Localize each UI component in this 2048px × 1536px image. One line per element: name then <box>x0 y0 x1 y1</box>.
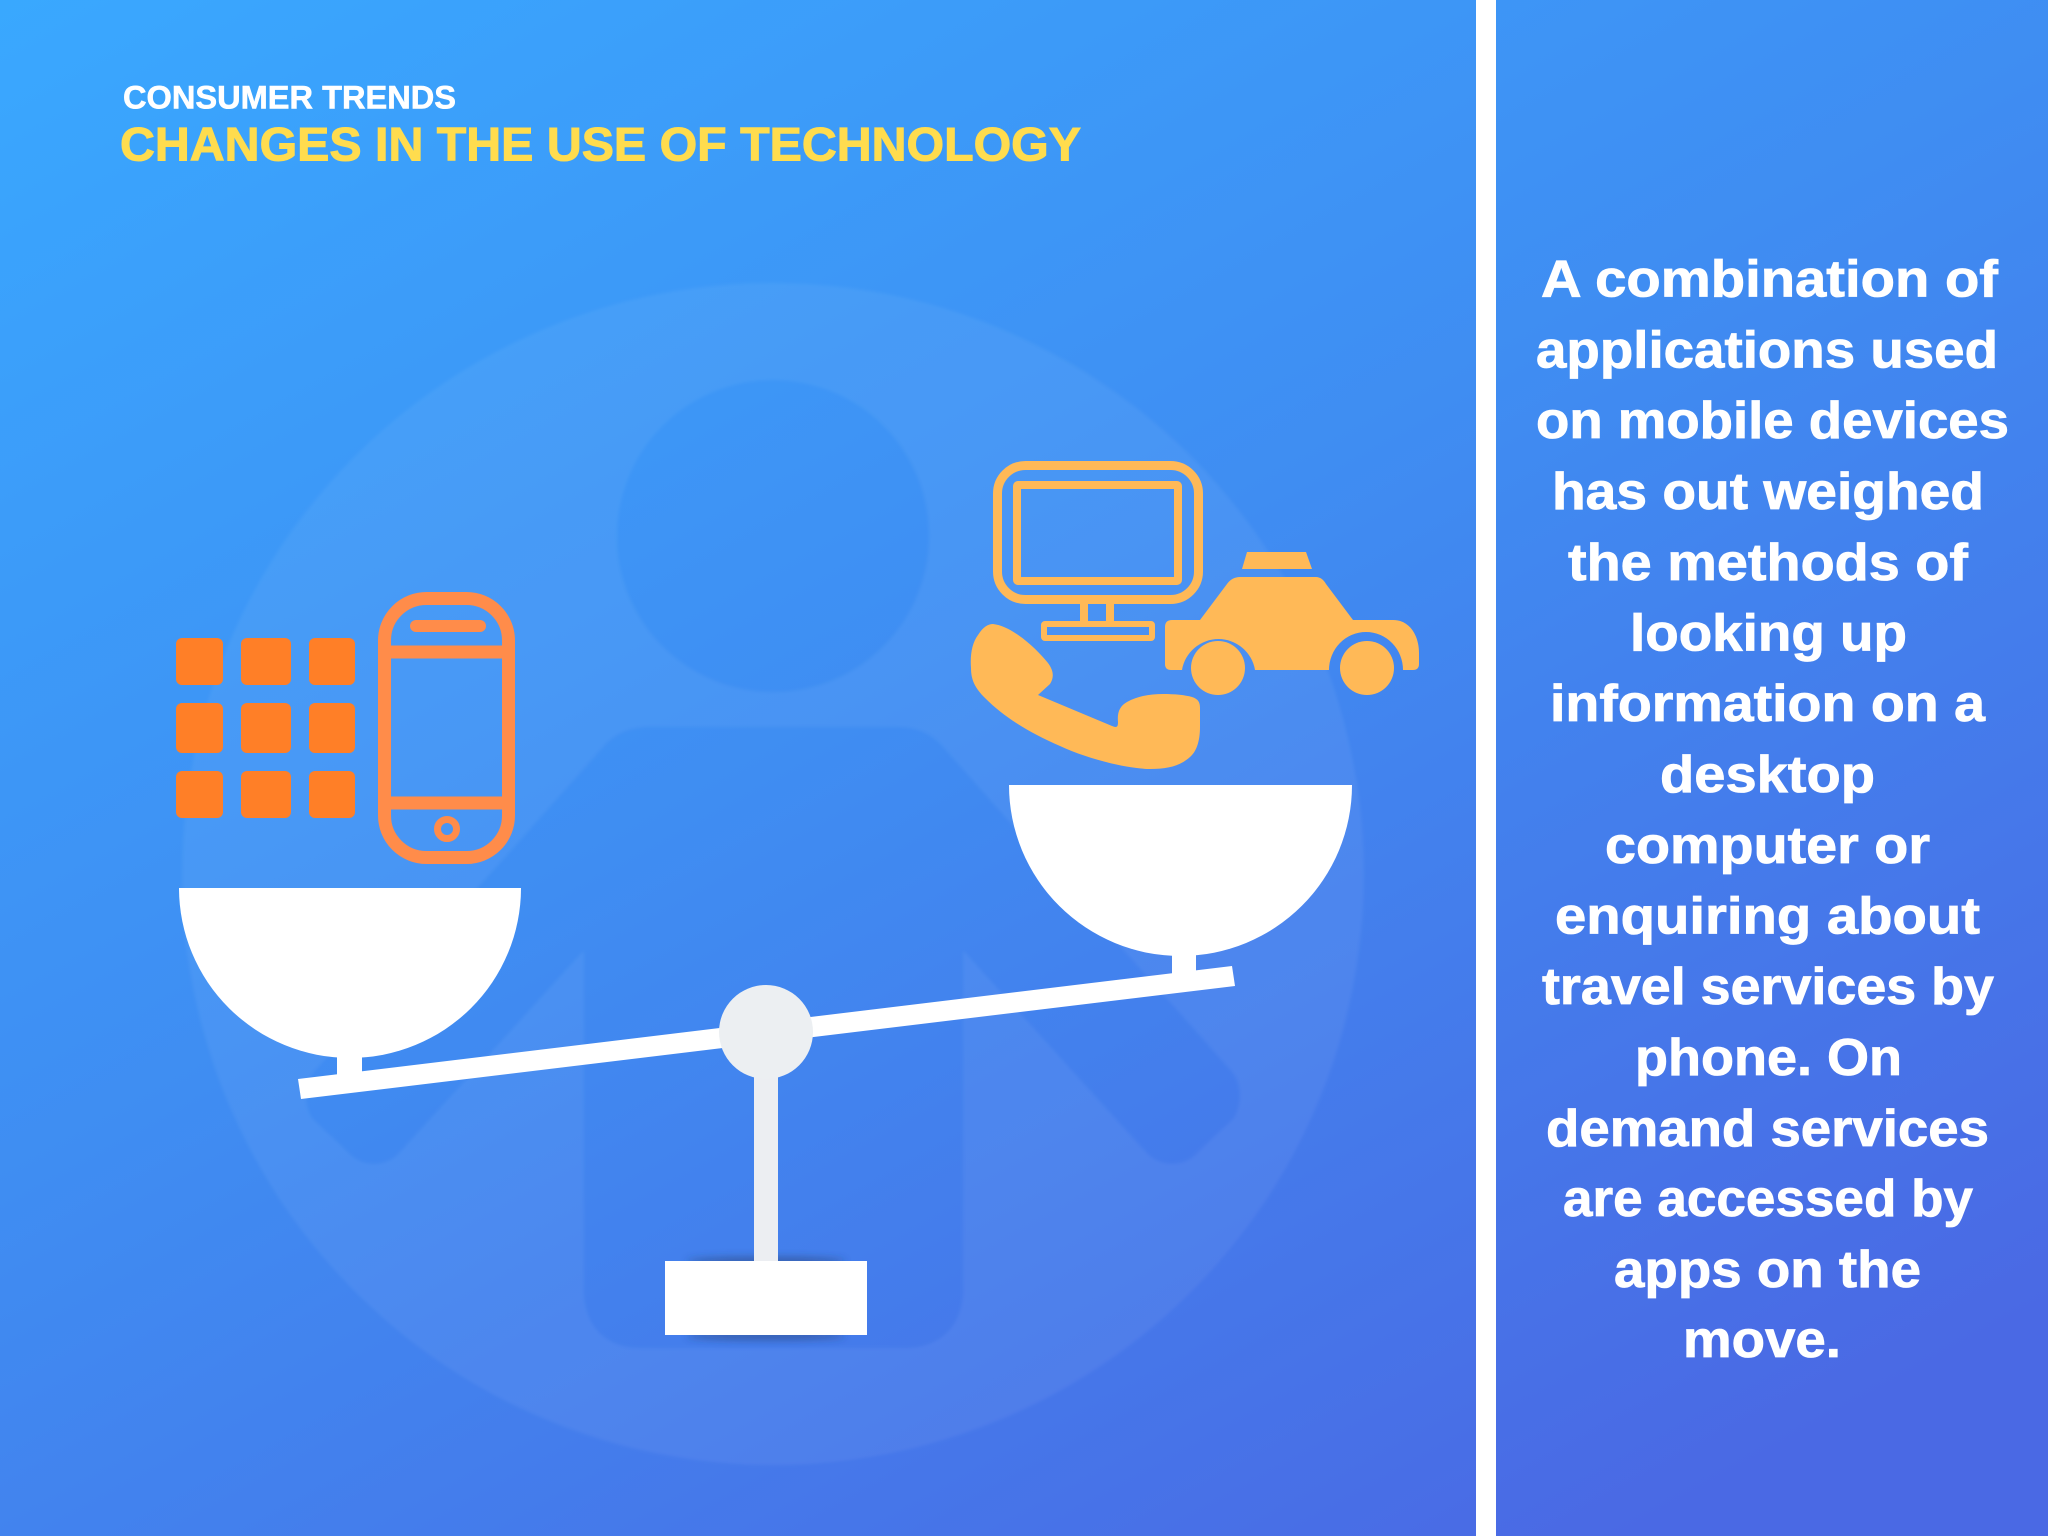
scale base <box>665 1261 867 1335</box>
pivot <box>719 985 813 1079</box>
body text: computer or <box>1605 817 1930 875</box>
ghost person emblem <box>182 283 1364 1465</box>
icon: taxi <box>1165 552 1419 695</box>
icon: telephone handset <box>971 624 1200 769</box>
body text: has out weighed <box>1552 463 1984 521</box>
scale post <box>754 1070 778 1262</box>
body text: A combination of <box>1541 250 1999 308</box>
body text: desktop <box>1660 746 1875 804</box>
white divider bar <box>1476 0 1496 1536</box>
body text: are accessed by <box>1563 1170 1973 1228</box>
body text: the methods of <box>1568 534 1969 592</box>
body text: on mobile devices <box>1536 392 2009 450</box>
body text: demand services <box>1546 1100 1989 1158</box>
heading kicker: CONSUMER TRENDS <box>123 80 456 116</box>
left bowl stem <box>337 1050 362 1080</box>
left bowl <box>179 888 521 1058</box>
scale beam <box>298 966 1235 1099</box>
right bowl stem <box>1172 950 1196 980</box>
icon: smartphone <box>384 598 509 858</box>
body text: information on a <box>1550 675 1986 733</box>
heading title: CHANGES IN THE USE OF TECHNOLOGY <box>120 118 1081 170</box>
base shadow <box>686 1257 846 1340</box>
icon: app grid <box>176 638 355 818</box>
body text: move. <box>1683 1311 1841 1369</box>
body text: looking up <box>1630 604 1907 662</box>
icon: desktop monitor <box>998 466 1198 638</box>
body text: apps on the <box>1614 1241 1921 1299</box>
heading <box>120 80 1081 170</box>
right bowl <box>1009 785 1352 956</box>
body text: travel services by <box>1542 958 1994 1016</box>
body text: phone. On <box>1635 1029 1902 1087</box>
balance scale <box>179 785 1352 1340</box>
body text: enquiring about <box>1555 888 1980 946</box>
body text <box>1536 250 2009 1369</box>
body text: applications used <box>1536 322 1998 380</box>
